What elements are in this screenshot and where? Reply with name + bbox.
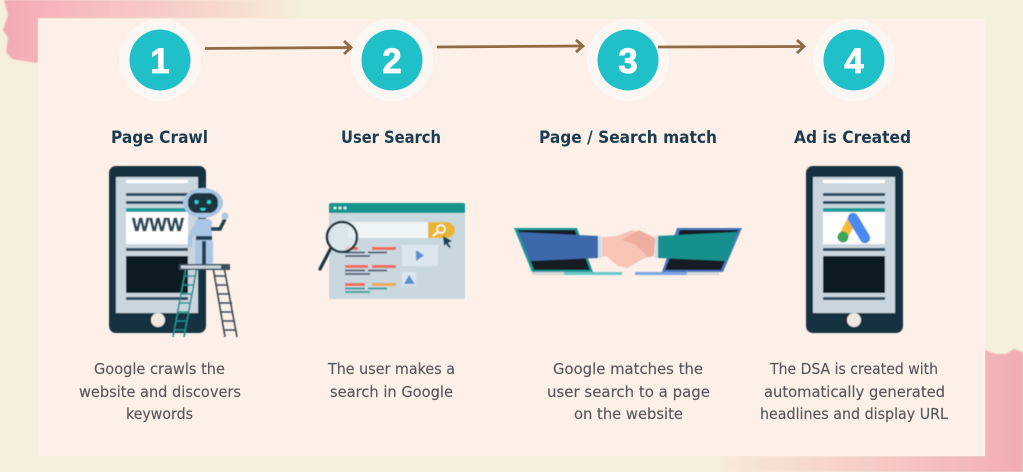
text: step 3 description: on the website [574, 405, 683, 423]
magnifier [327, 222, 357, 252]
arrow: step 2 to 3 [437, 40, 583, 52]
text: step 2 description: The user makes a [327, 360, 455, 378]
heading: User Search: User Search [341, 128, 441, 147]
heading: Page Crawl: Page Crawl [111, 128, 208, 147]
result lines [345, 247, 396, 286]
ladder: teal [173, 267, 197, 337]
text: step 4 description [760, 360, 949, 423]
text: step 1 description: website and discovers [79, 383, 241, 401]
step 4 number [813, 19, 895, 101]
arrow: step 3 to 4 [658, 40, 804, 53]
text: step 4 description: automatically generated [764, 383, 945, 401]
left laptop [514, 228, 593, 272]
image tile [402, 272, 416, 286]
icon: phone with robot crawler [109, 166, 237, 337]
right laptop [662, 228, 742, 272]
step 3 number: 3 [618, 42, 638, 81]
text: step 1 description [79, 360, 241, 423]
step 4 number: 4 [844, 42, 864, 81]
left sleeve [518, 232, 598, 261]
text: step 1 description: Google crawls the [94, 360, 225, 378]
heading: Page / Search match: Page / Search match [539, 128, 717, 147]
arrow: step 1 to 2 [205, 41, 351, 54]
text: step 3 description [547, 360, 710, 423]
text: step 3 description: user search to a page [547, 383, 710, 401]
right sleeve [657, 232, 737, 261]
robot [183, 183, 228, 264]
platform [179, 264, 230, 270]
step 1 number: 1 [150, 42, 170, 81]
search bar [348, 222, 428, 238]
text: step 2 description: search in Google [330, 383, 453, 401]
watercolor: bottom right [720, 349, 1023, 472]
step 2 number [351, 19, 433, 101]
icon: browser search window [320, 203, 465, 299]
icon: phone with robot crawler: WWW [132, 215, 184, 235]
step 3 number [587, 19, 669, 101]
text: step 4 description: headlines and display URL [760, 405, 949, 423]
video tile [402, 245, 438, 266]
step 1 number [119, 19, 201, 101]
icon: handshake through laptops [514, 228, 742, 275]
heading: Ad is Created: Ad is Created [794, 128, 911, 147]
ladder: dark [213, 267, 237, 337]
text: step 2 description [327, 360, 455, 401]
text: step 1 description: keywords [126, 405, 193, 423]
text: step 3 description: Google matches the [553, 360, 703, 378]
hands [602, 230, 655, 268]
icon: phone with Google Ads logo [806, 166, 903, 333]
step 2 number: 2 [382, 42, 402, 81]
watercolor: top left [3, 0, 300, 63]
text: step 4 description: The DSA is created with [769, 360, 938, 378]
